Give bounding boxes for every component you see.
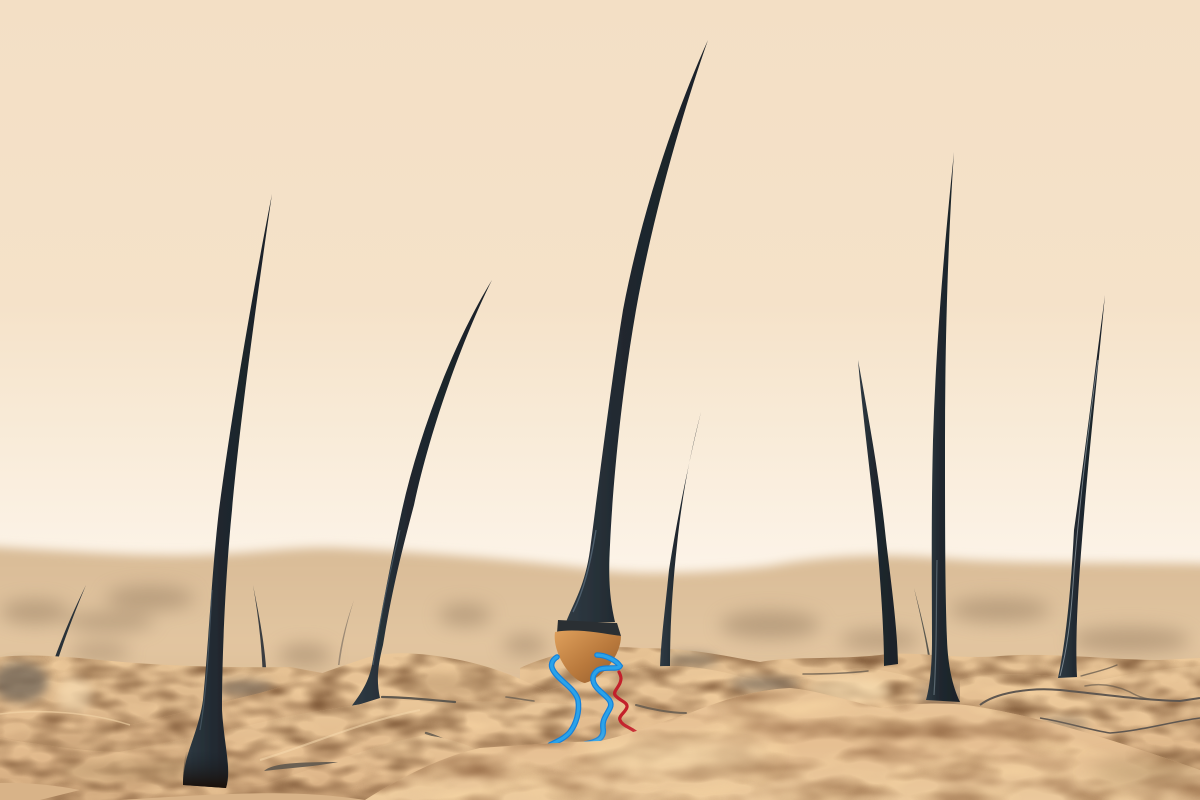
follicle with blood vessels xyxy=(550,40,708,745)
far hair: right thin xyxy=(914,588,930,656)
back center and right skin ridges xyxy=(520,647,1200,760)
right hair: tall thin xyxy=(1058,295,1105,678)
wrinkle lines: right area xyxy=(803,665,1160,700)
foreground-left low ridge xyxy=(120,793,365,800)
far blurred skin hills xyxy=(0,544,1200,740)
large right hair xyxy=(926,152,960,702)
flat crease left foreground xyxy=(264,762,338,771)
foreground large hair with dark root xyxy=(183,194,272,788)
wrinkle lines: left area xyxy=(382,697,686,751)
central hair shaft xyxy=(566,40,708,622)
lower left skin layer xyxy=(0,700,580,800)
faint thin far hairs xyxy=(39,585,930,709)
far hair: very faint xyxy=(338,600,354,665)
highlight on right tall hair xyxy=(1060,360,1098,676)
foreground large skin hill xyxy=(365,688,1200,800)
mid skin ridge: left xyxy=(0,653,570,800)
right front skin ridge with crease xyxy=(980,689,1200,800)
red artery xyxy=(615,672,637,733)
blue vein left highlight xyxy=(550,657,579,745)
far hair: left thin xyxy=(39,585,86,709)
blue vein left xyxy=(550,657,579,745)
follicle bulb xyxy=(555,631,621,683)
mid hair xyxy=(351,280,492,707)
mid skin ridge: center right xyxy=(520,666,1040,800)
far hair: behind tall hair xyxy=(253,585,267,692)
blue vein right xyxy=(585,655,620,744)
right hair: tilted left xyxy=(858,360,898,666)
small hair behind center xyxy=(660,412,701,667)
right far skin ridge xyxy=(960,666,1200,780)
blue vein right highlight xyxy=(585,655,620,744)
shaft highlight xyxy=(573,530,596,612)
front-left skin fold xyxy=(0,735,500,800)
back left skin ridge with shadowed basin xyxy=(0,656,360,760)
dark collar xyxy=(557,620,621,636)
